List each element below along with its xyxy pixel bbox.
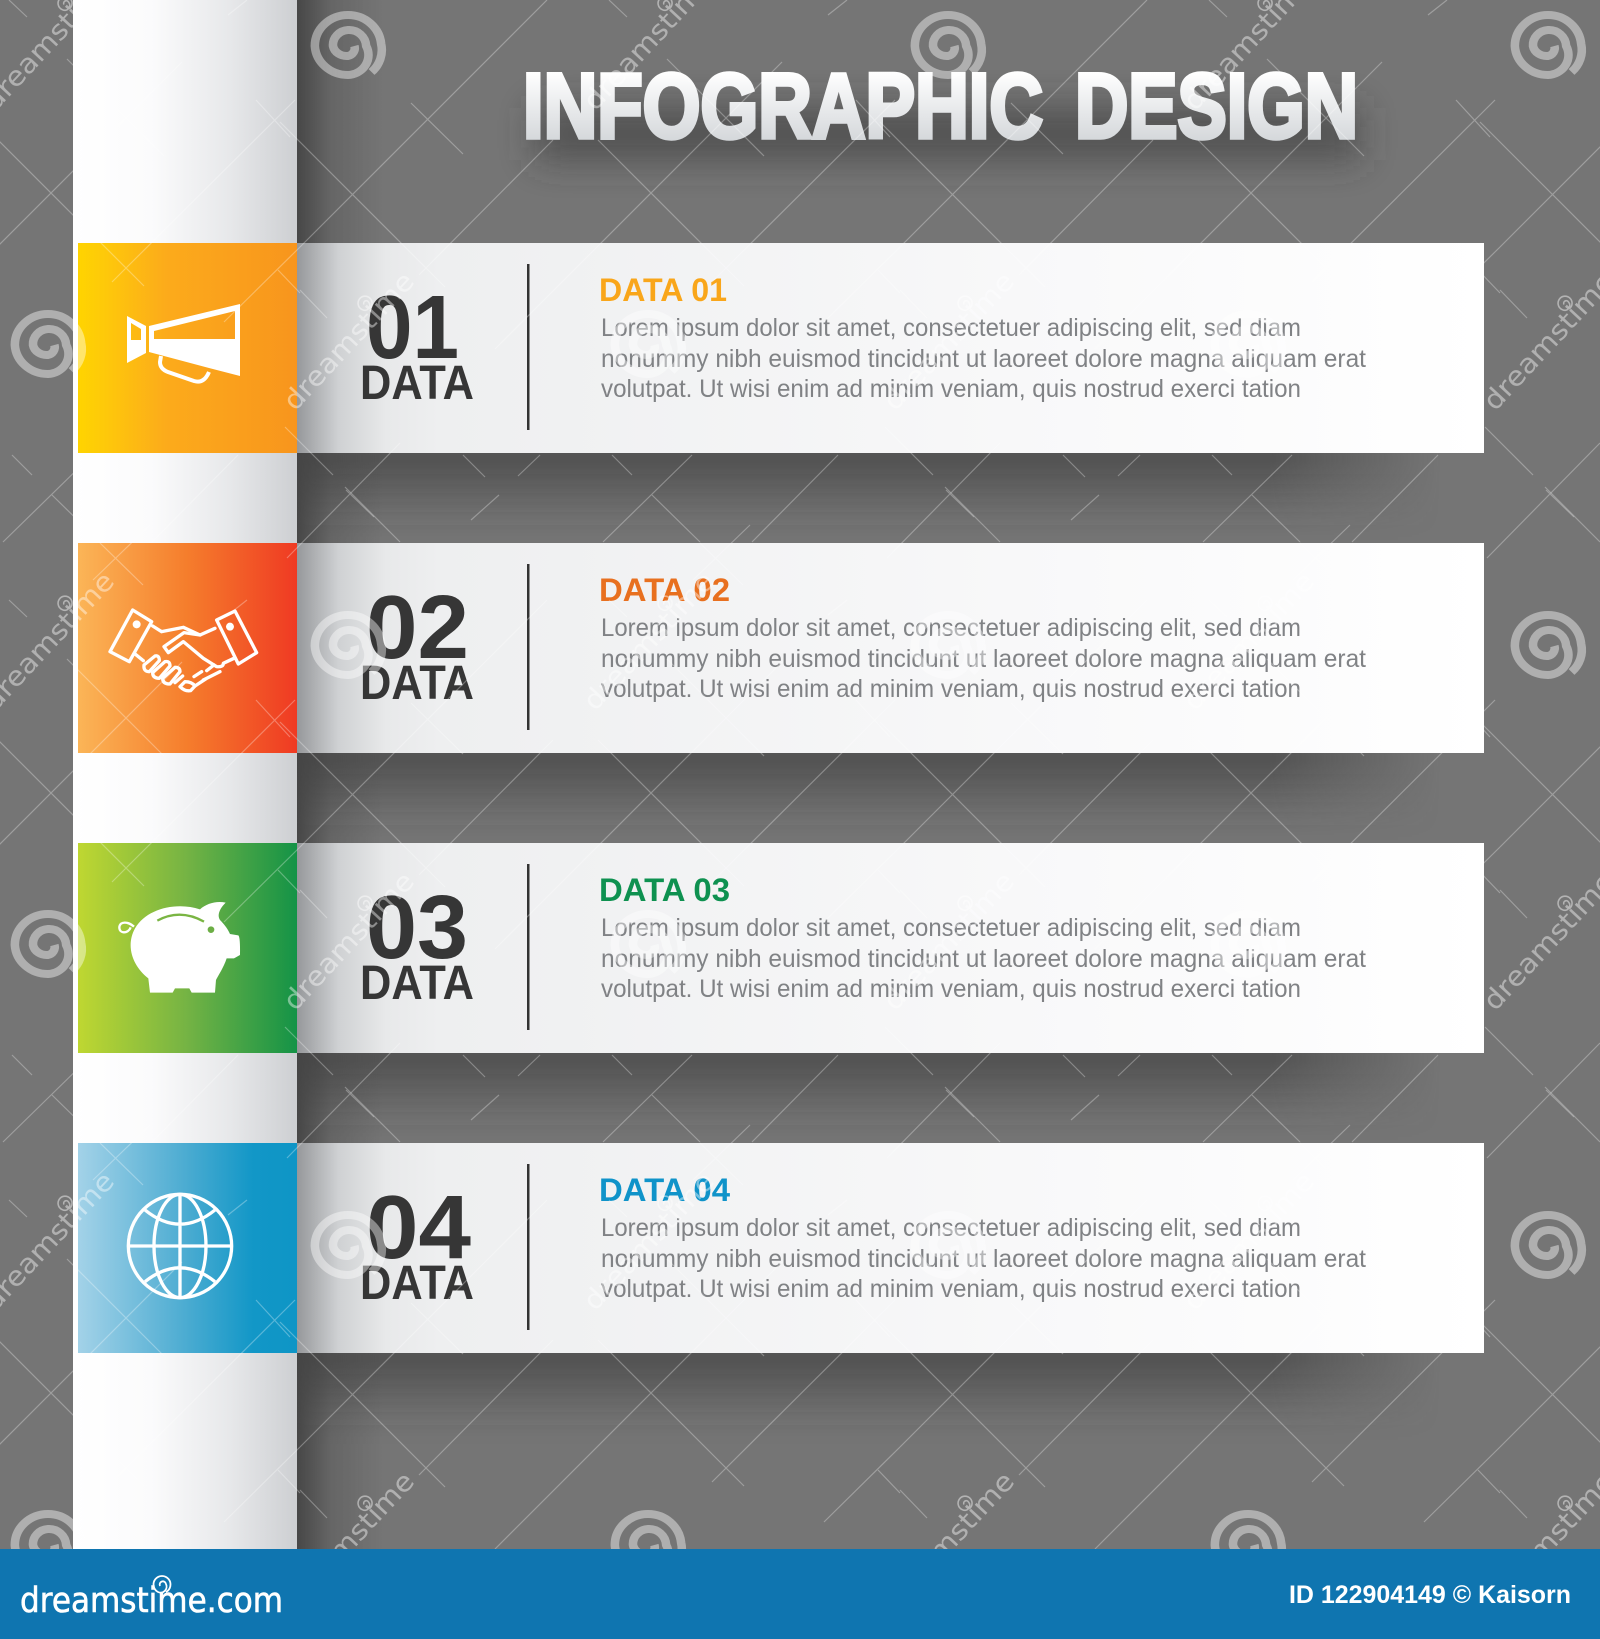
icon tile: yellow xyxy=(78,243,297,453)
body text: Lorem ipsum dolor sit amet, consectetuer adipiscing elit, sed diam xyxy=(601,914,1301,942)
row shadows xyxy=(297,440,1467,1430)
watermark overlay: dreamstime xyxy=(877,866,1021,1017)
body text: volutpat. Ut wisi enim ad minim veniam, quis nostrud exerci tation xyxy=(601,975,1301,1003)
title: DESIGN xyxy=(1075,56,1358,158)
label DATA: DATA xyxy=(360,1257,474,1310)
body text xyxy=(601,614,1366,703)
watermark overlay: dreamstime xyxy=(277,866,421,1017)
card 03 xyxy=(297,843,1484,1053)
watermark overlay: dreamstime xyxy=(877,1466,1021,1617)
panel: row 04 xyxy=(78,1143,1484,1353)
column shadow xyxy=(297,0,382,1549)
number 02: 02 xyxy=(366,578,469,678)
body text: volutpat. Ut wisi enim ad minim veniam, quis nostrud exerci tation xyxy=(601,375,1301,403)
title: INFOGRAPHIC xyxy=(523,56,1043,158)
body text: volutpat. Ut wisi enim ad minim veniam, quis nostrud exerci tation xyxy=(601,675,1301,703)
body text: volutpat. Ut wisi enim ad minim veniam, quis nostrud exerci tation xyxy=(601,1275,1301,1303)
label DATA: DATA xyxy=(360,357,474,410)
white vertical column xyxy=(73,0,297,1549)
icon tile: green xyxy=(78,843,297,1053)
icon: handshake xyxy=(110,610,257,691)
heading DATA 03: DATA 03 xyxy=(599,872,730,908)
panel: row 03 xyxy=(78,843,1484,1053)
card 02 xyxy=(297,543,1484,753)
heading DATA 04: DATA 04 xyxy=(599,1172,730,1208)
divider xyxy=(527,864,530,1030)
watermark overlay: dreamstime xyxy=(577,566,721,717)
watermark overlay: dreamstime xyxy=(577,1166,721,1317)
body text: nonummy nibh euismod tincidunt ut laoreet dolore magna aliquam erat xyxy=(601,645,1366,673)
body text xyxy=(601,914,1366,1003)
body text: Lorem ipsum dolor sit amet, consectetuer adipiscing elit, sed diam xyxy=(601,614,1301,642)
image id and credit: ID 122904149 © Kaisorn xyxy=(1289,1581,1571,1609)
panel: row 02 xyxy=(78,543,1484,753)
label DATA: DATA xyxy=(360,657,474,710)
logo spiral xyxy=(154,1576,171,1593)
body text: nonummy nibh euismod tincidunt ut laoreet dolore magna aliquam erat xyxy=(601,1245,1366,1273)
card 01 xyxy=(297,243,1484,453)
title shadow xyxy=(535,108,1360,160)
logo text: dreamstime.com xyxy=(20,1581,283,1621)
heading DATA 02: DATA 02 xyxy=(599,572,730,608)
number 03: 03 xyxy=(366,878,468,978)
panel: row 01 xyxy=(78,243,1484,453)
body text xyxy=(601,314,1366,403)
body text: nonummy nibh euismod tincidunt ut laoreet dolore magna aliquam erat xyxy=(601,345,1366,373)
footer banner xyxy=(0,1549,1600,1639)
icon: globe xyxy=(128,1194,232,1298)
number 01: 01 xyxy=(366,278,459,378)
watermark overlay: dreamstime xyxy=(1177,566,1321,717)
body text: Lorem ipsum dolor sit amet, consectetuer adipiscing elit, sed diam xyxy=(601,314,1301,342)
label DATA: DATA xyxy=(360,957,474,1010)
divider xyxy=(527,564,530,730)
watermark overlay: dreamstime xyxy=(277,1466,421,1617)
divider xyxy=(527,264,530,430)
watermark overlay: dreamstime xyxy=(1177,1166,1321,1317)
body text xyxy=(601,1214,1366,1303)
watermark overlay: dreamstime xyxy=(877,266,1021,417)
heading DATA 01: DATA 01 xyxy=(599,272,727,308)
body text: nonummy nibh euismod tincidunt ut laoreet dolore magna aliquam erat xyxy=(601,945,1366,973)
icon tile: orange xyxy=(78,543,297,753)
body text: Lorem ipsum dolor sit amet, consectetuer adipiscing elit, sed diam xyxy=(601,1214,1301,1242)
icon: piggy bank xyxy=(119,902,240,993)
icon tile: blue xyxy=(78,1143,297,1353)
card 04 xyxy=(297,1143,1484,1353)
icon: megaphone xyxy=(127,304,240,382)
divider xyxy=(527,1164,530,1330)
number 04: 04 xyxy=(366,1178,471,1278)
watermark overlay: dreamstime xyxy=(277,266,421,417)
